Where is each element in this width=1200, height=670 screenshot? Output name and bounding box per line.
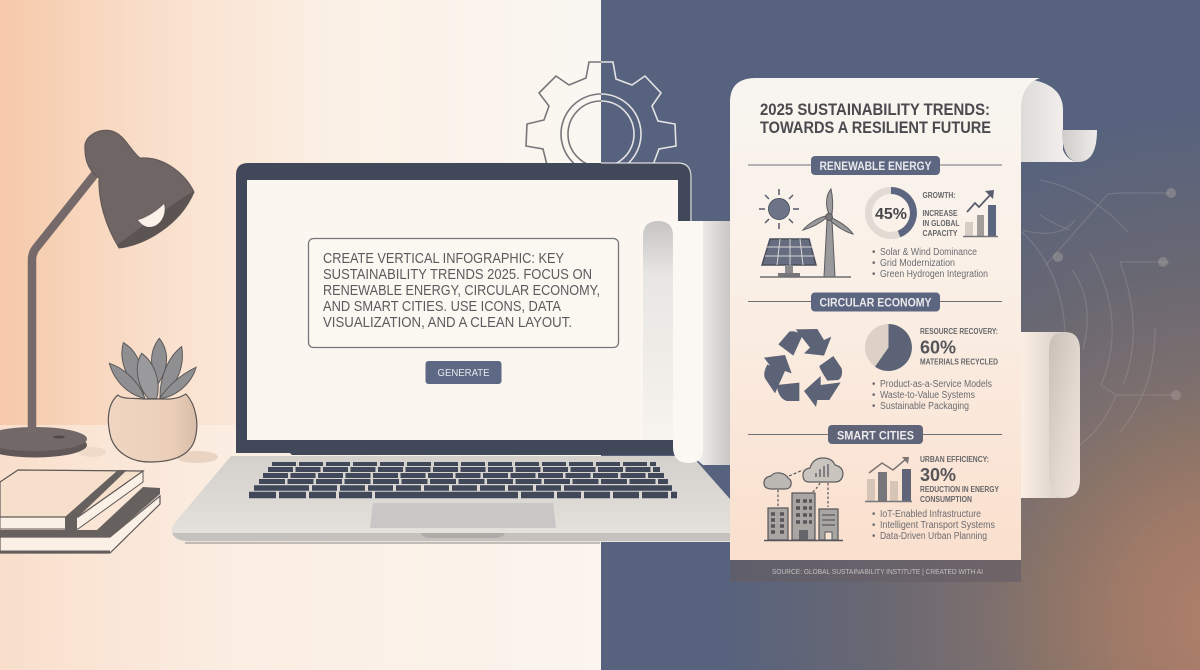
icon: city buildings — [764, 493, 843, 540]
stat: urban efficiency: REDUCTION IN ENERGY — [920, 485, 1000, 494]
section: renewable energy — [748, 156, 1002, 280]
laptop screen — [247, 180, 678, 440]
bar chart with trend line — [865, 457, 912, 502]
circuit pattern — [1022, 180, 1181, 445]
keyboard — [249, 464, 677, 495]
stat: growth: INCREASE — [922, 209, 958, 218]
lamp arm — [32, 174, 95, 435]
section: circular economy — [748, 292, 1002, 412]
bullet list: smart cities: • — [872, 520, 876, 531]
stat: urban efficiency: 30% — [920, 465, 956, 485]
bullet list: circular economy — [872, 379, 992, 412]
laptop lid — [236, 163, 692, 455]
bullet list: renewable energy — [872, 247, 988, 280]
main title: 2025 SUSTAINABILITY TRENDS: — [760, 101, 990, 119]
top scroll curl — [1010, 78, 1097, 162]
trackpad notch — [421, 533, 505, 538]
section: smart cities — [748, 425, 1002, 542]
lower notebook — [0, 487, 160, 553]
bullet list: renewable energy: • — [872, 269, 876, 280]
stat: growth: IN GLOBAL — [922, 219, 960, 228]
plant leaves — [109, 338, 196, 399]
stat: resource recovery: 60% — [920, 338, 956, 358]
generate button: GENERATE — [438, 368, 490, 379]
stat: urban efficiency: CONSUMPTION — [920, 495, 972, 504]
trackpad — [370, 503, 556, 528]
icon: sun — [759, 189, 799, 229]
heading: circular economy — [748, 292, 1002, 312]
stat: resource recovery — [920, 327, 998, 366]
bullet list: smart cities: • — [872, 509, 876, 520]
lamp head — [85, 130, 194, 248]
pie chart: 60% — [865, 324, 912, 371]
ground line — [760, 276, 851, 278]
prompt text: SUSTAINABILITY TRENDS 2025. FOCUS ON — [323, 267, 592, 283]
scroll footer — [730, 558, 1021, 582]
prompt text: AND SMART CITIES. USE ICONS, DATA — [323, 299, 561, 315]
bullet list: circular economy: • — [872, 401, 876, 412]
bullet list: renewable energy: Green Hydrogen Integration — [880, 269, 988, 280]
icon: recycle arrows — [764, 329, 842, 407]
stat: growth: CAPACITY — [922, 229, 958, 238]
background: desk surface — [0, 425, 601, 670]
icon: connected clouds — [764, 458, 843, 507]
prompt text: CREATE VERTICAL INFOGRAPHIC: KEY — [323, 251, 564, 267]
heading: renewable energy — [748, 156, 1002, 175]
stat: urban efficiency: URBAN EFFICIENCY: — [920, 455, 989, 464]
plant pot — [108, 394, 197, 462]
bullet list: renewable energy: Grid Modernization — [880, 258, 955, 269]
prompt box — [308, 238, 618, 348]
bullet list: smart cities: Intelligent Transport Systems — [880, 520, 995, 531]
stat: resource recovery: MATERIALS RECYCLED — [920, 358, 998, 366]
stat: growth — [922, 191, 960, 238]
icon: solar panel — [762, 239, 816, 277]
main title — [760, 101, 991, 137]
heading: smart cities: SMART CITIES — [837, 430, 914, 442]
stacked notebooks — [0, 470, 160, 553]
bullet list: renewable energy: • — [872, 258, 876, 269]
bullet list: circular economy: • — [872, 379, 876, 390]
notebook strap — [65, 470, 127, 533]
ribbon connecting laptop to scroll — [643, 221, 730, 465]
infographic scroll panel — [730, 78, 1040, 560]
bullet list: circular economy: • — [872, 390, 876, 401]
middle scroll curl — [1021, 332, 1080, 498]
stat: growth: GROWTH: — [922, 191, 956, 200]
prompt text: RENEWABLE ENERGY, CIRCULAR ECONOMY, — [323, 283, 600, 299]
laptop — [172, 163, 730, 543]
bullet list: circular economy: Sustainable Packaging — [880, 401, 969, 412]
scroll footer: SOURCE: GLOBAL SUSTAINABILITY INSTITUTE | CREATED WITH AI — [772, 567, 983, 576]
potted succulent — [108, 338, 218, 463]
bullet list: smart cities: IoT-Enabled Infrastructure — [880, 509, 981, 520]
bullet list: smart cities: • — [872, 531, 876, 542]
prompt text — [323, 251, 600, 331]
generate button — [426, 361, 502, 384]
bullet list: renewable energy: • — [872, 247, 876, 258]
upper notebook — [0, 470, 143, 529]
heading: smart cities — [748, 425, 1002, 444]
stat: urban efficiency — [920, 455, 1000, 504]
donut chart: 45%: 45% — [875, 206, 907, 223]
donut chart: 45% — [868, 190, 914, 236]
icon: growth bars and arrow — [963, 190, 998, 236]
bullet list: circular economy: Product-as-a-Service Models — [880, 379, 992, 390]
bullet list: smart cities — [872, 509, 995, 542]
main title: TOWARDS A RESILIENT FUTURE — [760, 119, 991, 137]
heading: circular economy: CIRCULAR ECONOMY — [820, 298, 932, 310]
heading: renewable energy: RENEWABLE ENERGY — [820, 161, 932, 173]
bullet list: renewable energy: Solar & Wind Dominance — [880, 247, 977, 258]
stat: resource recovery: RESOURCE RECOVERY: — [920, 327, 998, 336]
background: warm left half — [0, 0, 601, 670]
lamp base — [0, 427, 106, 458]
prompt text: VISUALIZATION, AND A CLEAN LAYOUT. — [323, 315, 572, 331]
laptop base — [172, 456, 730, 543]
bullet list: smart cities: Data-Driven Urban Planning — [880, 531, 987, 542]
gear icon — [526, 62, 676, 174]
background: slate right half — [601, 0, 1200, 670]
desk lamp — [0, 130, 194, 458]
icon: wind turbine — [803, 189, 853, 277]
bullet list: circular economy: Waste-to-Value Systems — [880, 390, 975, 401]
